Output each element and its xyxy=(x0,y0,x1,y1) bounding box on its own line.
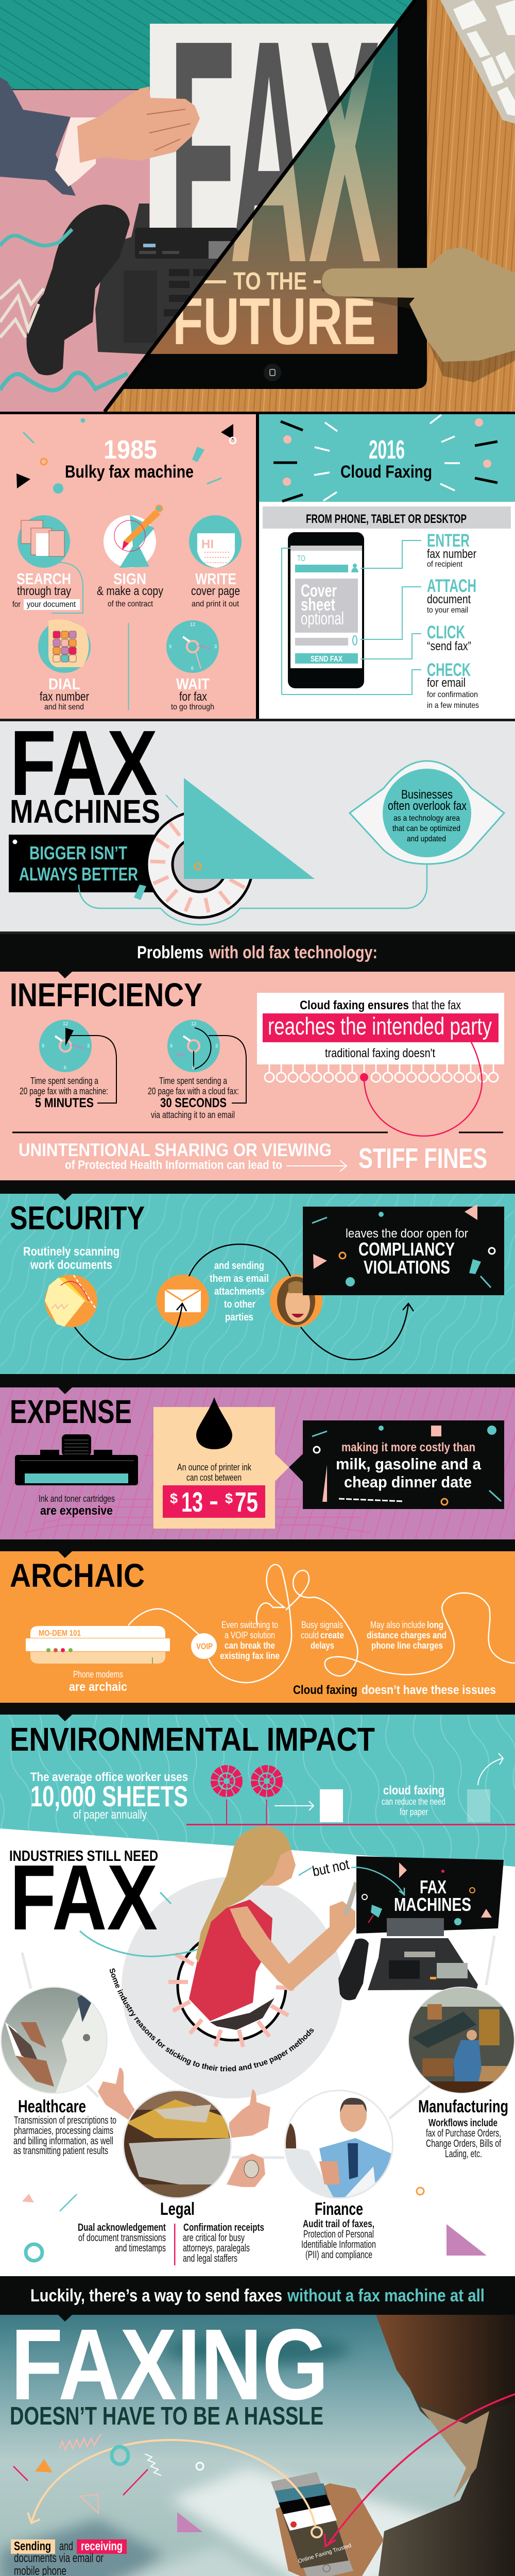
label: finance: Audit trail of faxes, xyxy=(303,2218,374,2230)
busy text: create xyxy=(320,1630,344,1640)
black callout xyxy=(289,1420,504,1509)
but not: but not xyxy=(311,1856,351,1879)
panel: expense xyxy=(0,1387,515,1539)
sheets stat: 10,000 SHEETS xyxy=(30,1780,188,1813)
label: legal: and timestamps xyxy=(115,2243,166,2254)
sending and receiving xyxy=(11,2539,127,2576)
FAX on screen xyxy=(176,56,380,345)
price card: An ounce of printer ink xyxy=(177,1462,252,1472)
label: legal: of document transmissions xyxy=(78,2232,166,2244)
teal strokes xyxy=(80,1892,199,1956)
confetti shapes xyxy=(13,2434,203,2532)
squiggle decoration xyxy=(0,229,128,391)
clock: 30 seconds: 9 xyxy=(170,1043,173,1048)
hand holding paper xyxy=(77,87,200,163)
binder rings xyxy=(265,1064,498,1082)
black callout: making it more costly than xyxy=(341,1440,475,1454)
paper with FAX xyxy=(150,24,395,230)
icon: search tray xyxy=(18,515,70,568)
step: click: “send fax” xyxy=(427,639,471,653)
label: healthcare: pharmacies, processing claims xyxy=(14,2125,113,2137)
callout: businesses: Businesses xyxy=(401,788,453,802)
FAX on screen: FUTURE xyxy=(173,284,376,359)
black callout: VIOLATIONS xyxy=(364,1257,450,1278)
voip text: can break the xyxy=(225,1640,275,1651)
step: enter: ENTER xyxy=(427,531,470,551)
voip text: Even switching to xyxy=(221,1620,278,1630)
label: finance: Identifiable Information xyxy=(301,2239,376,2250)
faded paper sheet xyxy=(467,1789,490,1822)
band: luckily xyxy=(0,2276,515,2315)
tablet xyxy=(103,0,427,389)
stat: 5 minutes: 20 page fax with a machine: xyxy=(20,1086,108,1096)
band: problems heading xyxy=(0,934,515,972)
woman with phone xyxy=(189,1826,358,2030)
band: problems heading: Problems xyxy=(137,943,203,962)
callout text: BIGGER ISN’T xyxy=(29,842,127,863)
panel: 1985 bulky fax machine xyxy=(0,414,515,721)
stat: 30 seconds: 20 page fax with a cloud fax: xyxy=(148,1086,239,1096)
icon: paper sheet xyxy=(320,1789,343,1822)
price card: $ xyxy=(170,1490,178,1506)
divider line xyxy=(128,623,129,710)
step: wait: to go through xyxy=(171,703,214,711)
title MACHINES: MACHINES xyxy=(10,793,160,830)
panel: environmental impact xyxy=(0,1715,515,1869)
label: legal: attorneys, paralegals xyxy=(183,2243,250,2254)
charges text: May also include xyxy=(370,1620,425,1630)
rule xyxy=(12,1131,503,1133)
label: legal: and legal staffers xyxy=(183,2253,237,2264)
modem caption: Phone modems xyxy=(73,1669,123,1680)
voip text: existing fax line xyxy=(220,1651,280,1661)
hand and phone: Online Faxing Trusted xyxy=(297,2543,352,2565)
connector lines xyxy=(282,540,421,694)
icon: portrait xyxy=(270,1275,322,1327)
divider xyxy=(0,412,515,414)
subheading: Cloud Faxing xyxy=(340,462,432,482)
blurred desk xyxy=(0,2334,464,2576)
black fax machines callout: FAX xyxy=(420,1876,447,1897)
teal triangle xyxy=(184,778,315,879)
label: legal: Confirmation receipts xyxy=(183,2222,264,2233)
step: sign: SIGN xyxy=(113,570,146,588)
curved text: Some industry reasons for sticking to their tried and true paper methods xyxy=(109,1968,314,2071)
icon: email xyxy=(157,1275,209,1327)
subheading: Bulky fax machine xyxy=(65,462,194,482)
label: legal: are critical for busy xyxy=(183,2232,245,2244)
label: legal: Dual acknowledgement xyxy=(78,2222,166,2233)
step: attach: to your email xyxy=(427,606,468,615)
band xyxy=(0,1180,515,1194)
step: wait: WAIT xyxy=(176,675,210,693)
connector xyxy=(52,563,83,613)
label: legal xyxy=(78,2199,264,2265)
cloud faxing reduction xyxy=(382,1784,445,1817)
step: attach: document xyxy=(427,592,471,606)
callout text: ALWAYS BETTER xyxy=(19,863,138,885)
ground line xyxy=(186,1824,515,1825)
sheets stat xyxy=(30,1770,188,1822)
panel: archaic xyxy=(0,1551,515,1703)
cloud faxing reduction: for paper xyxy=(400,1807,428,1817)
email text: them as email xyxy=(210,1273,269,1284)
step: wait xyxy=(171,675,214,711)
clock: 5 minutes xyxy=(39,1020,92,1072)
photo: finance xyxy=(284,2089,393,2200)
stat: 30 seconds: 30 SECONDS xyxy=(160,1096,227,1110)
connector curve xyxy=(79,864,427,925)
hand: stopwatch xyxy=(227,2154,265,2187)
heading: SECURITY xyxy=(10,1199,145,1236)
callout: businesses: that can be optimized xyxy=(392,824,460,833)
charges text: long xyxy=(427,1620,443,1630)
icon: scanned document xyxy=(45,1275,97,1327)
fax machine in hero xyxy=(95,204,238,354)
step: check: for confirmation xyxy=(427,690,478,699)
icon: write cover page: HI xyxy=(201,537,214,551)
cartridge caption: Ink and toner cartridges xyxy=(39,1494,115,1504)
callout: businesses xyxy=(350,761,504,864)
heading: INEFFICIENCY xyxy=(10,976,202,1013)
cartridge caption: are expensive xyxy=(40,1504,113,1518)
photo: legal xyxy=(123,2089,232,2200)
heading 2016: 2016 xyxy=(369,435,405,464)
step: check: CHECK xyxy=(427,660,471,680)
modem caption xyxy=(69,1669,127,1694)
clock: 30 seconds: 6 xyxy=(192,1065,195,1070)
icon: wait clock: 9 xyxy=(169,644,171,649)
cartridge caption xyxy=(39,1494,115,1518)
heading: ARCHAIC xyxy=(10,1557,145,1594)
subheading: DOESN’T HAVE TO BE A HASSLE xyxy=(10,2402,323,2430)
step: sign: of the contract xyxy=(108,600,153,608)
callout: businesses: as a technology area xyxy=(393,814,460,823)
burst rays xyxy=(273,415,497,501)
clock: 5 minutes: 12 xyxy=(63,1021,68,1026)
stat: 30 seconds: Time spent sending a xyxy=(159,1076,228,1086)
fines statement xyxy=(19,1140,487,1174)
band: luckily: without a fax machine at all xyxy=(287,2286,485,2306)
band xyxy=(0,1374,515,1387)
step: click xyxy=(427,622,471,653)
step: attach: ATTACH xyxy=(427,576,476,596)
decorative shapes xyxy=(22,2188,487,2261)
email text: and sending xyxy=(214,1260,264,1272)
decorative shapes xyxy=(16,418,236,494)
pink looping line xyxy=(360,1042,482,1136)
ring on phone xyxy=(312,2527,322,2537)
clock: 5 minutes: 3 xyxy=(87,1043,90,1048)
step: search: for xyxy=(12,600,21,609)
step: check: in a few minutes xyxy=(427,701,479,710)
fines statement: of Protected Health Information can lead to xyxy=(65,1158,282,1172)
icon: modem xyxy=(26,1626,170,1664)
peach arc arrow xyxy=(28,2440,315,2526)
panel: inefficiency xyxy=(0,972,515,1180)
person xyxy=(374,2315,515,2576)
label: manufacturing xyxy=(418,2097,508,2160)
panel: fax machines bigger isn't better xyxy=(0,711,515,934)
step: search: your document xyxy=(27,600,76,609)
phone form: Cover xyxy=(301,581,337,601)
icon: wait clock: 6 xyxy=(191,666,194,671)
icon: ink cartridge xyxy=(15,1434,138,1485)
step: enter: of recipient xyxy=(427,560,462,569)
routinely scanning text xyxy=(23,1245,119,1272)
step: dial: DIAL xyxy=(48,675,80,693)
hand: thumbs up right xyxy=(229,2089,270,2138)
ring with ticks xyxy=(168,1932,294,2047)
label: finance: Protection of Personal xyxy=(303,2229,374,2240)
black callout xyxy=(9,835,163,892)
teal curve to fax machines xyxy=(299,1867,404,1895)
price card xyxy=(153,1397,289,1529)
black callout xyxy=(303,1204,504,1295)
hero background xyxy=(0,0,515,412)
hand shadow xyxy=(322,289,515,382)
title FAX: FAX xyxy=(10,711,158,815)
heading FAX: FAX xyxy=(10,1846,158,1950)
icon: wait clock: 3 xyxy=(214,644,217,649)
white card: Cloud faxing ensures xyxy=(300,998,409,1012)
callout: businesses: and updated xyxy=(407,835,446,843)
band xyxy=(0,1703,515,1715)
heading FAXING: FAXING xyxy=(11,2308,329,2421)
sheets stat: of paper annually xyxy=(73,1808,147,1822)
sending and receiving: documents via email or xyxy=(14,2551,104,2565)
price card: 75 xyxy=(235,1487,258,1518)
busy text: delays xyxy=(311,1640,334,1651)
sheets stat: The average office worker uses xyxy=(30,1770,188,1784)
price card: 13 xyxy=(181,1487,203,1518)
step: enter xyxy=(427,531,476,569)
step: sign: & make a copy xyxy=(97,584,163,598)
stat: 30 seconds: via attaching it to an email xyxy=(151,1110,235,1120)
callout text xyxy=(19,842,138,885)
black callout: leaves the door open for xyxy=(346,1227,468,1241)
icon: trees xyxy=(214,1769,279,1824)
conclusion xyxy=(293,1683,496,1697)
fines statement: UNINTENTIONAL SHARING OR VIEWING xyxy=(19,1140,332,1160)
step: search: through tray xyxy=(17,584,71,598)
conclusion: doesn’t have these issues xyxy=(362,1683,496,1697)
icon: wait clock xyxy=(166,620,219,673)
home button xyxy=(264,364,281,381)
charges text xyxy=(367,1620,447,1651)
routinely scanning text: Routinely scanning xyxy=(23,1245,119,1259)
voip text xyxy=(220,1620,280,1661)
stat: 5 minutes: 5 MINUTES xyxy=(35,1096,94,1110)
black fax machines callout: MACHINES xyxy=(394,1894,471,1915)
FAX on screen: TO THE xyxy=(233,268,307,295)
hand and phone xyxy=(271,2472,384,2576)
small shapes xyxy=(134,795,201,900)
step: enter: fax number xyxy=(427,547,476,561)
label: finance: Finance xyxy=(315,2199,363,2219)
arrow to paper xyxy=(274,1801,314,1810)
step: write xyxy=(191,570,240,608)
fax machine xyxy=(338,1918,478,2000)
busy text xyxy=(301,1620,344,1651)
black callout: COMPLIANCY xyxy=(358,1239,455,1260)
band: luckily: Luckily, there’s a way to send faxes xyxy=(30,2286,282,2306)
phone form: TO xyxy=(297,554,305,563)
photo: manufacturing xyxy=(408,1986,515,2097)
icon: modem: MO-DEM 101 xyxy=(39,1629,81,1638)
busy text: could xyxy=(301,1630,319,1640)
suit sleeve xyxy=(0,77,98,196)
heading 1985: 1985 xyxy=(104,435,157,464)
icon: wait clock: 12 xyxy=(190,622,195,627)
squiggle line xyxy=(128,1565,515,1683)
panel: 2016 cloud faxing xyxy=(259,414,515,719)
white card xyxy=(257,993,504,1064)
panel: faxing photo xyxy=(0,2308,515,2576)
step: check xyxy=(427,660,479,710)
step: check: for email xyxy=(427,676,466,690)
VOIP badge: VOIP xyxy=(196,1641,213,1651)
heading: EXPENSE xyxy=(10,1393,132,1430)
step: search: SEARCH xyxy=(16,570,71,588)
sending and receiving: receiving xyxy=(81,2539,123,2553)
label: finance xyxy=(301,2199,376,2261)
heading small: INDUSTRIES STILL NEED xyxy=(9,1848,158,1865)
finger hand xyxy=(322,248,515,362)
panel: security xyxy=(0,1194,515,1374)
hand: thumbs up left xyxy=(98,2067,138,2120)
photo: healthcare xyxy=(0,1984,108,2097)
white card: traditional faxing doesn't xyxy=(325,1046,435,1060)
step: dial: fax number xyxy=(40,690,89,704)
curve arrows xyxy=(75,1244,414,1360)
phone form: SEND FAX xyxy=(311,655,342,664)
conclusion: Cloud faxing xyxy=(293,1683,357,1697)
clock: 30 seconds: 3 xyxy=(215,1043,218,1048)
phone form: optional xyxy=(301,609,344,629)
connector lines xyxy=(22,1936,494,2158)
clock: 30 seconds xyxy=(167,1020,220,1072)
label: healthcare: Healthcare xyxy=(18,2097,86,2116)
icon: dial keypad xyxy=(38,619,91,673)
black callout: milk, gasoline and a xyxy=(336,1455,482,1473)
price card: can cost between xyxy=(186,1472,242,1483)
step: search xyxy=(12,570,80,610)
label: manufacturing: Lading, etc. xyxy=(445,2148,482,2160)
VOIP badge xyxy=(191,1633,217,1659)
phone form: sheet xyxy=(301,595,335,615)
stat: 5 minutes: Time spent sending a xyxy=(30,1076,99,1086)
stat: 5 minutes xyxy=(20,1076,108,1110)
heading: ENVIRONMENTAL IMPACT xyxy=(10,1721,375,1758)
label: finance: (PII) and compliance xyxy=(305,2249,372,2261)
grey circle xyxy=(122,1877,343,2098)
step: dial: and hit send xyxy=(44,703,84,711)
hero diagonal line xyxy=(105,0,415,412)
step: write: cover page xyxy=(191,584,240,598)
label: healthcare: Transmission of prescriptions to xyxy=(14,2115,116,2126)
email text: parties xyxy=(225,1312,253,1323)
step: dial xyxy=(40,675,89,711)
voip text: a VOIP solution xyxy=(225,1630,275,1640)
cloud faxing reduction: cloud faxing xyxy=(383,1784,444,1798)
label: legal: Legal xyxy=(160,2199,195,2219)
clock: 30 seconds: 12 xyxy=(191,1021,196,1026)
red arc arrow xyxy=(324,2394,515,2546)
email text: to other xyxy=(224,1299,255,1310)
white card: that the fax xyxy=(412,998,461,1012)
stat: 30 seconds xyxy=(148,1076,239,1120)
panel: industries still need fax xyxy=(0,1826,515,2265)
step: sign xyxy=(97,570,163,608)
black callout: cheap dinner date xyxy=(344,1473,472,1491)
curved arrow xyxy=(478,1753,503,1785)
step: wait: for fax xyxy=(179,690,207,704)
step: click: CLICK xyxy=(427,622,465,642)
fax handset xyxy=(26,205,130,375)
clock: 5 minutes: 6 xyxy=(64,1065,66,1070)
cloud faxing reduction: can reduce the need xyxy=(382,1797,445,1807)
icon: write cover page xyxy=(189,515,242,568)
modem caption: are archaic xyxy=(69,1680,127,1694)
email text xyxy=(210,1260,269,1323)
label: healthcare: and billing information, as well xyxy=(13,2136,113,2147)
step: write: and print it out xyxy=(192,600,239,608)
label: healthcare: as transmitting patient results xyxy=(13,2145,108,2157)
band: problems heading: with old fax technology: xyxy=(209,943,377,962)
keyboard xyxy=(440,0,515,124)
connector lines xyxy=(71,1036,246,1103)
routinely scanning text: work documents xyxy=(30,1258,112,1272)
email text: attachments xyxy=(214,1286,265,1297)
black fax machines callout xyxy=(356,1856,504,1934)
step: write: WRITE xyxy=(195,570,236,588)
step: attach xyxy=(427,576,476,615)
phone form xyxy=(288,532,364,688)
charges text: phone line charges xyxy=(371,1640,443,1651)
icon: sign pencil xyxy=(104,505,162,568)
label: healthcare xyxy=(13,2097,116,2157)
charges text: distance charges and xyxy=(367,1630,447,1640)
busy text: Busy signals xyxy=(301,1620,343,1630)
dial wheel graphic xyxy=(147,811,253,918)
device bar xyxy=(263,506,511,529)
callout: businesses: often overlook fax xyxy=(388,799,467,813)
sending and receiving: Sending xyxy=(14,2539,51,2553)
price card: $ xyxy=(225,1490,233,1506)
band xyxy=(0,1539,515,1551)
sending and receiving: and xyxy=(59,2539,73,2553)
icon: ink drop xyxy=(196,1397,232,1449)
clock: 5 minutes: 9 xyxy=(42,1043,44,1048)
